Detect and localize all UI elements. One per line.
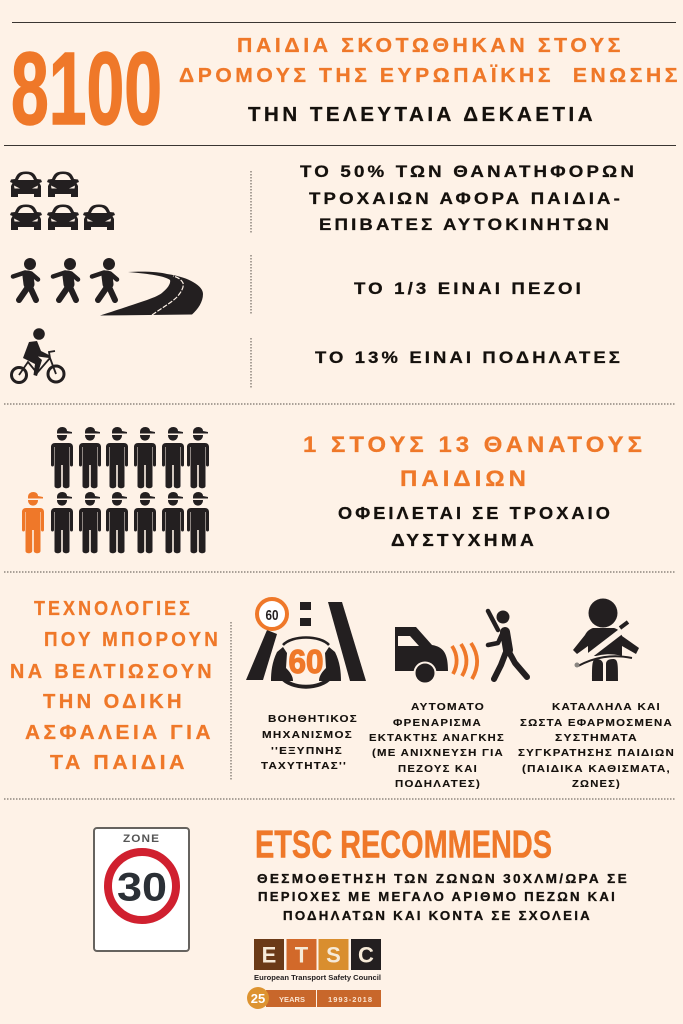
pictogram: 1 in 13 children bbox=[22, 427, 209, 553]
icon: intelligent speed assistance: 60 bbox=[288, 643, 324, 680]
logo: ETSC: T bbox=[295, 942, 309, 968]
headline text: ΠΑΙΔΙΑ ΣΚΟΤΩΘΗΚΑΝ ΣΤΟΥΣ bbox=[237, 35, 624, 57]
text: 1 in 13 deaths: ΟΦΕΙΛΕΤΑΙ ΣΕ ΤΡΟΧΑΙΟ bbox=[338, 503, 613, 523]
headline text: ΔΡΟΜΟΥΣ ΤΗΣ ΕΥΡΩΠΑΪΚΗΣ ΕΝΩΣΗΣ bbox=[179, 64, 681, 87]
logo: ETSC bbox=[247, 939, 381, 1009]
icon: zone 30 sign: 30 bbox=[117, 866, 167, 910]
heading: technologies: ΑΣΦΑΛΕΙΑ ΓΙΑ bbox=[25, 721, 214, 744]
text: cyclists: ΤΟ 13% ΕΙΝΑΙ ΠΟΔΗΛΑΤΕΣ bbox=[315, 348, 623, 367]
logo: ETSC: S bbox=[326, 942, 341, 968]
caption: intelligent speed: ΤΑΧΥΤΗΤΑΣ'' bbox=[261, 760, 347, 772]
icon: cyclist bbox=[12, 328, 64, 382]
icon: zone 30 sign bbox=[94, 828, 189, 951]
caption: child restraint: ΣΥΣΤΗΜΑΤΑ bbox=[555, 732, 638, 744]
heading: technologies: ΠΟΥ ΜΠΟΡΟΥΝ bbox=[44, 628, 221, 651]
heading: technologies bbox=[10, 597, 221, 774]
caption: emergency braking: ΠΕΖΟΥΣ ΚΑΙ bbox=[398, 763, 478, 775]
caption: child restraint: ΖΩΝΕΣ) bbox=[572, 778, 621, 790]
icon: intelligent speed assistance bbox=[246, 599, 366, 687]
caption: child restraint: (ΠΑΙΔΙΚΑ ΚΑΘΙΣΜΑΤΑ, bbox=[522, 763, 671, 775]
text: car passengers: ΤΟ 50% ΤΩΝ ΘΑΝΑΤΗΦΟΡΩΝ bbox=[300, 162, 637, 181]
heading: technologies: ΝΑ ΒΕΛΤΙΩΣΟΥΝ bbox=[10, 660, 215, 683]
text: 1 in 13 deaths: ΠΑΙΔΙΩΝ bbox=[400, 466, 530, 491]
logo: ETSC: European Transport Safety Council bbox=[254, 975, 381, 982]
text: car passengers bbox=[300, 162, 637, 234]
text: 1 in 13 deaths: ΔΥΣΤΥΧΗΜΑ bbox=[391, 530, 537, 550]
headline text: ΤΗΝ ΤΕΛΕΥΤΑΙΑ ΔΕΚΑΕΤΙΑ bbox=[248, 104, 596, 126]
caption: emergency braking: ΠΟΔΗΛΑΤΕΣ) bbox=[395, 778, 481, 790]
text: recommendation bbox=[257, 871, 629, 923]
caption: emergency braking bbox=[369, 701, 505, 790]
caption: emergency braking: (ΜΕ ΑΝΙΧΝΕΥΣΗ ΓΙΑ bbox=[372, 747, 504, 759]
logo: ETSC: C bbox=[358, 942, 374, 968]
icon: child seat belt bbox=[573, 598, 639, 681]
heading: technologies: ΤΕΧΝΟΛΟΓΙΕΣ bbox=[34, 597, 193, 620]
icon: intelligent speed assistance: 60 bbox=[266, 607, 278, 624]
caption: intelligent speed bbox=[261, 713, 358, 772]
caption: emergency braking: ΦΡΕΝΑΡΙΣΜΑ bbox=[393, 717, 482, 729]
text: recommendation: ΠΟΔΗΛΑΤΩΝ ΚΑΙ ΚΟΝΤΑ ΣΕ ΣΧΟΛΕΙΑ bbox=[283, 908, 592, 923]
icon: pedestrians and road bbox=[13, 258, 203, 316]
icon: emergency braking bbox=[395, 610, 527, 684]
caption: child restraint: ΣΥΓΚΡΑΤΗΣΗΣ ΠΑΙΔΙΩΝ bbox=[518, 747, 675, 759]
caption: emergency braking: ΕΚΤΑΚΤΗΣ ΑΝΑΓΚΗΣ bbox=[369, 732, 505, 744]
text: 1 in 13 deaths: 1 ΣΤΟΥΣ 13 ΘΑΝΑΤΟΥΣ bbox=[303, 432, 646, 457]
heading: ETSC recommends: ETSC RECOMMENDS bbox=[255, 824, 552, 866]
logo: ETSC: E bbox=[262, 942, 276, 968]
caption: child restraint bbox=[518, 701, 675, 790]
text: recommendation: ΘΕΣΜΟΘΕΤΗΣΗ ΤΩΝ ΖΩΝΩΝ 30ΧΛΜ/ΩΡΑ ΣΕ bbox=[257, 871, 629, 886]
heading: technologies: ΤΗΝ ΟΔΙΚΗ bbox=[43, 690, 185, 713]
headline number 8100: 8100 bbox=[11, 31, 162, 146]
caption: intelligent speed: ΜΗΧΑΝΙΣΜΟΣ bbox=[262, 729, 353, 741]
caption: child restraint: ΣΩΣΤΑ ΕΦΑΡΜΟΣΜΕΝΑ bbox=[520, 717, 673, 729]
text: car passengers: ΕΠΙΒΑΤΕΣ ΑΥΤΟΚΙΝΗΤΩΝ bbox=[319, 215, 612, 234]
text: 1 in 13 deaths bbox=[303, 432, 646, 550]
text: recommendation: ΠΕΡΙΟΧΕΣ ΜΕ ΜΕΓΑΛΟ ΑΡΙΘΜΟ ΠΕΖΩΝ ΚΑΙ bbox=[258, 889, 617, 904]
text: car passengers: ΤΡΟΧΑΙΩΝ ΑΦΟΡΑ ΠΑΙΔΙΑ- bbox=[309, 189, 623, 208]
caption: intelligent speed: ''ΕΞΥΠΝΗΣ bbox=[271, 745, 343, 757]
logo: ETSC: YEARS bbox=[279, 995, 305, 1004]
headline text bbox=[179, 35, 681, 126]
caption: emergency braking: ΑΥΤΟΜΑΤΟ bbox=[411, 701, 485, 713]
caption: intelligent speed: ΒΟΗΘΗΤΙΚΟΣ bbox=[268, 713, 358, 725]
icon: zone 30 sign: ZONE bbox=[123, 833, 160, 845]
caption: child restraint: ΚΑΤΑΛΛΗΛΑ ΚΑΙ bbox=[552, 701, 661, 713]
heading: technologies: ΤΑ ΠΑΙΔΙΑ bbox=[50, 751, 188, 774]
icon: five cars bbox=[10, 172, 115, 230]
logo: ETSC: 25 bbox=[251, 991, 265, 1006]
text: pedestrians: ΤΟ 1/3 ΕΙΝΑΙ ΠΕΖΟΙ bbox=[354, 279, 584, 298]
logo: ETSC: 1993-2018 bbox=[328, 995, 372, 1004]
